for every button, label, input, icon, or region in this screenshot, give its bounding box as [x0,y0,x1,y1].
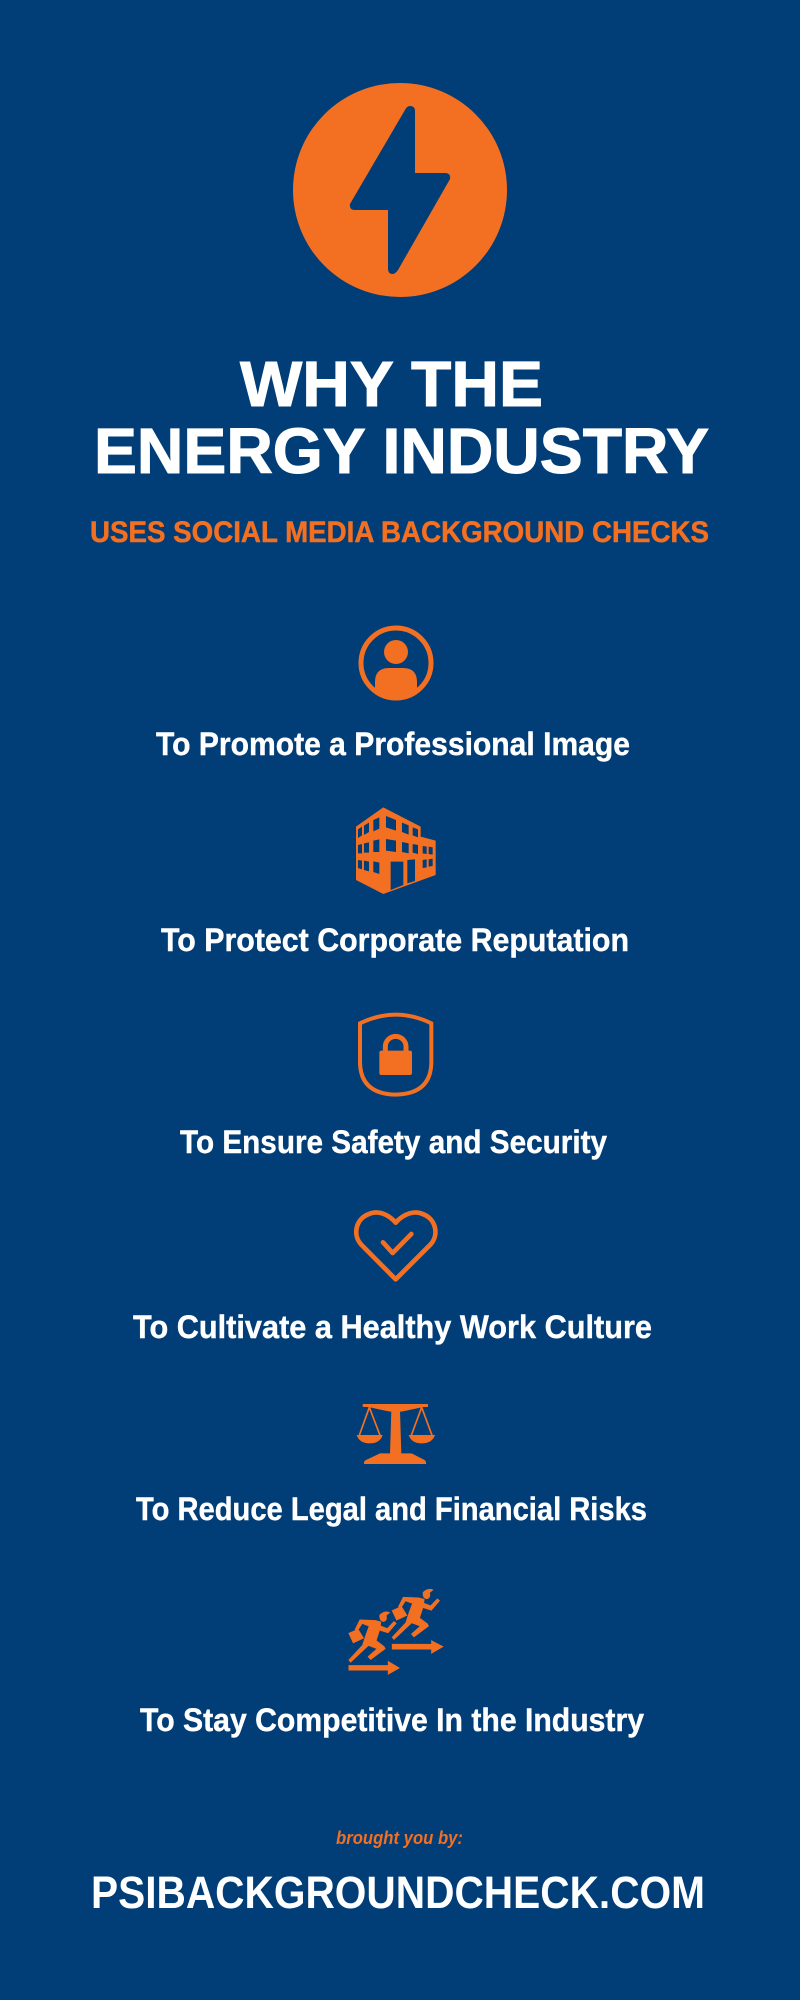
item text: legal and financial risks: To Reduce Legal and Financial Risks [136,1491,647,1527]
runner: upper right [392,1589,443,1653]
item text: safety and security: To Ensure Safety and Security [180,1124,607,1160]
footer website: PSIBACKGROUNDCHECK.COM [91,1867,705,1918]
icon: heart with check [356,1212,435,1279]
icon: shield with padlock [360,1015,431,1095]
icon: two running businessmen with arrows [349,1589,443,1674]
subtitle: USES SOCIAL MEDIA BACKGROUND CHECKS [90,516,709,549]
item text: corporate reputation: To Protect Corporate Reputation [161,922,629,958]
footer label: brought you by: brought you by: [336,1828,463,1848]
icon: person in circle [361,628,431,699]
item text: professional image: To Promote a Professional Image [156,726,630,762]
title [94,348,709,487]
title: WHY THE [240,348,543,420]
item text: stay competitive: To Stay Competitive In the Industry [140,1702,644,1738]
icon: lightning bolt in orange circle [293,83,507,297]
icon: balance scales [357,1404,435,1464]
item text: healthy work culture: To Cultivate a Healthy Work Culture [133,1309,652,1345]
runner: lower left [349,1612,399,1674]
icon: office building [356,807,436,894]
title: ENERGY INDUSTRY [94,415,709,487]
